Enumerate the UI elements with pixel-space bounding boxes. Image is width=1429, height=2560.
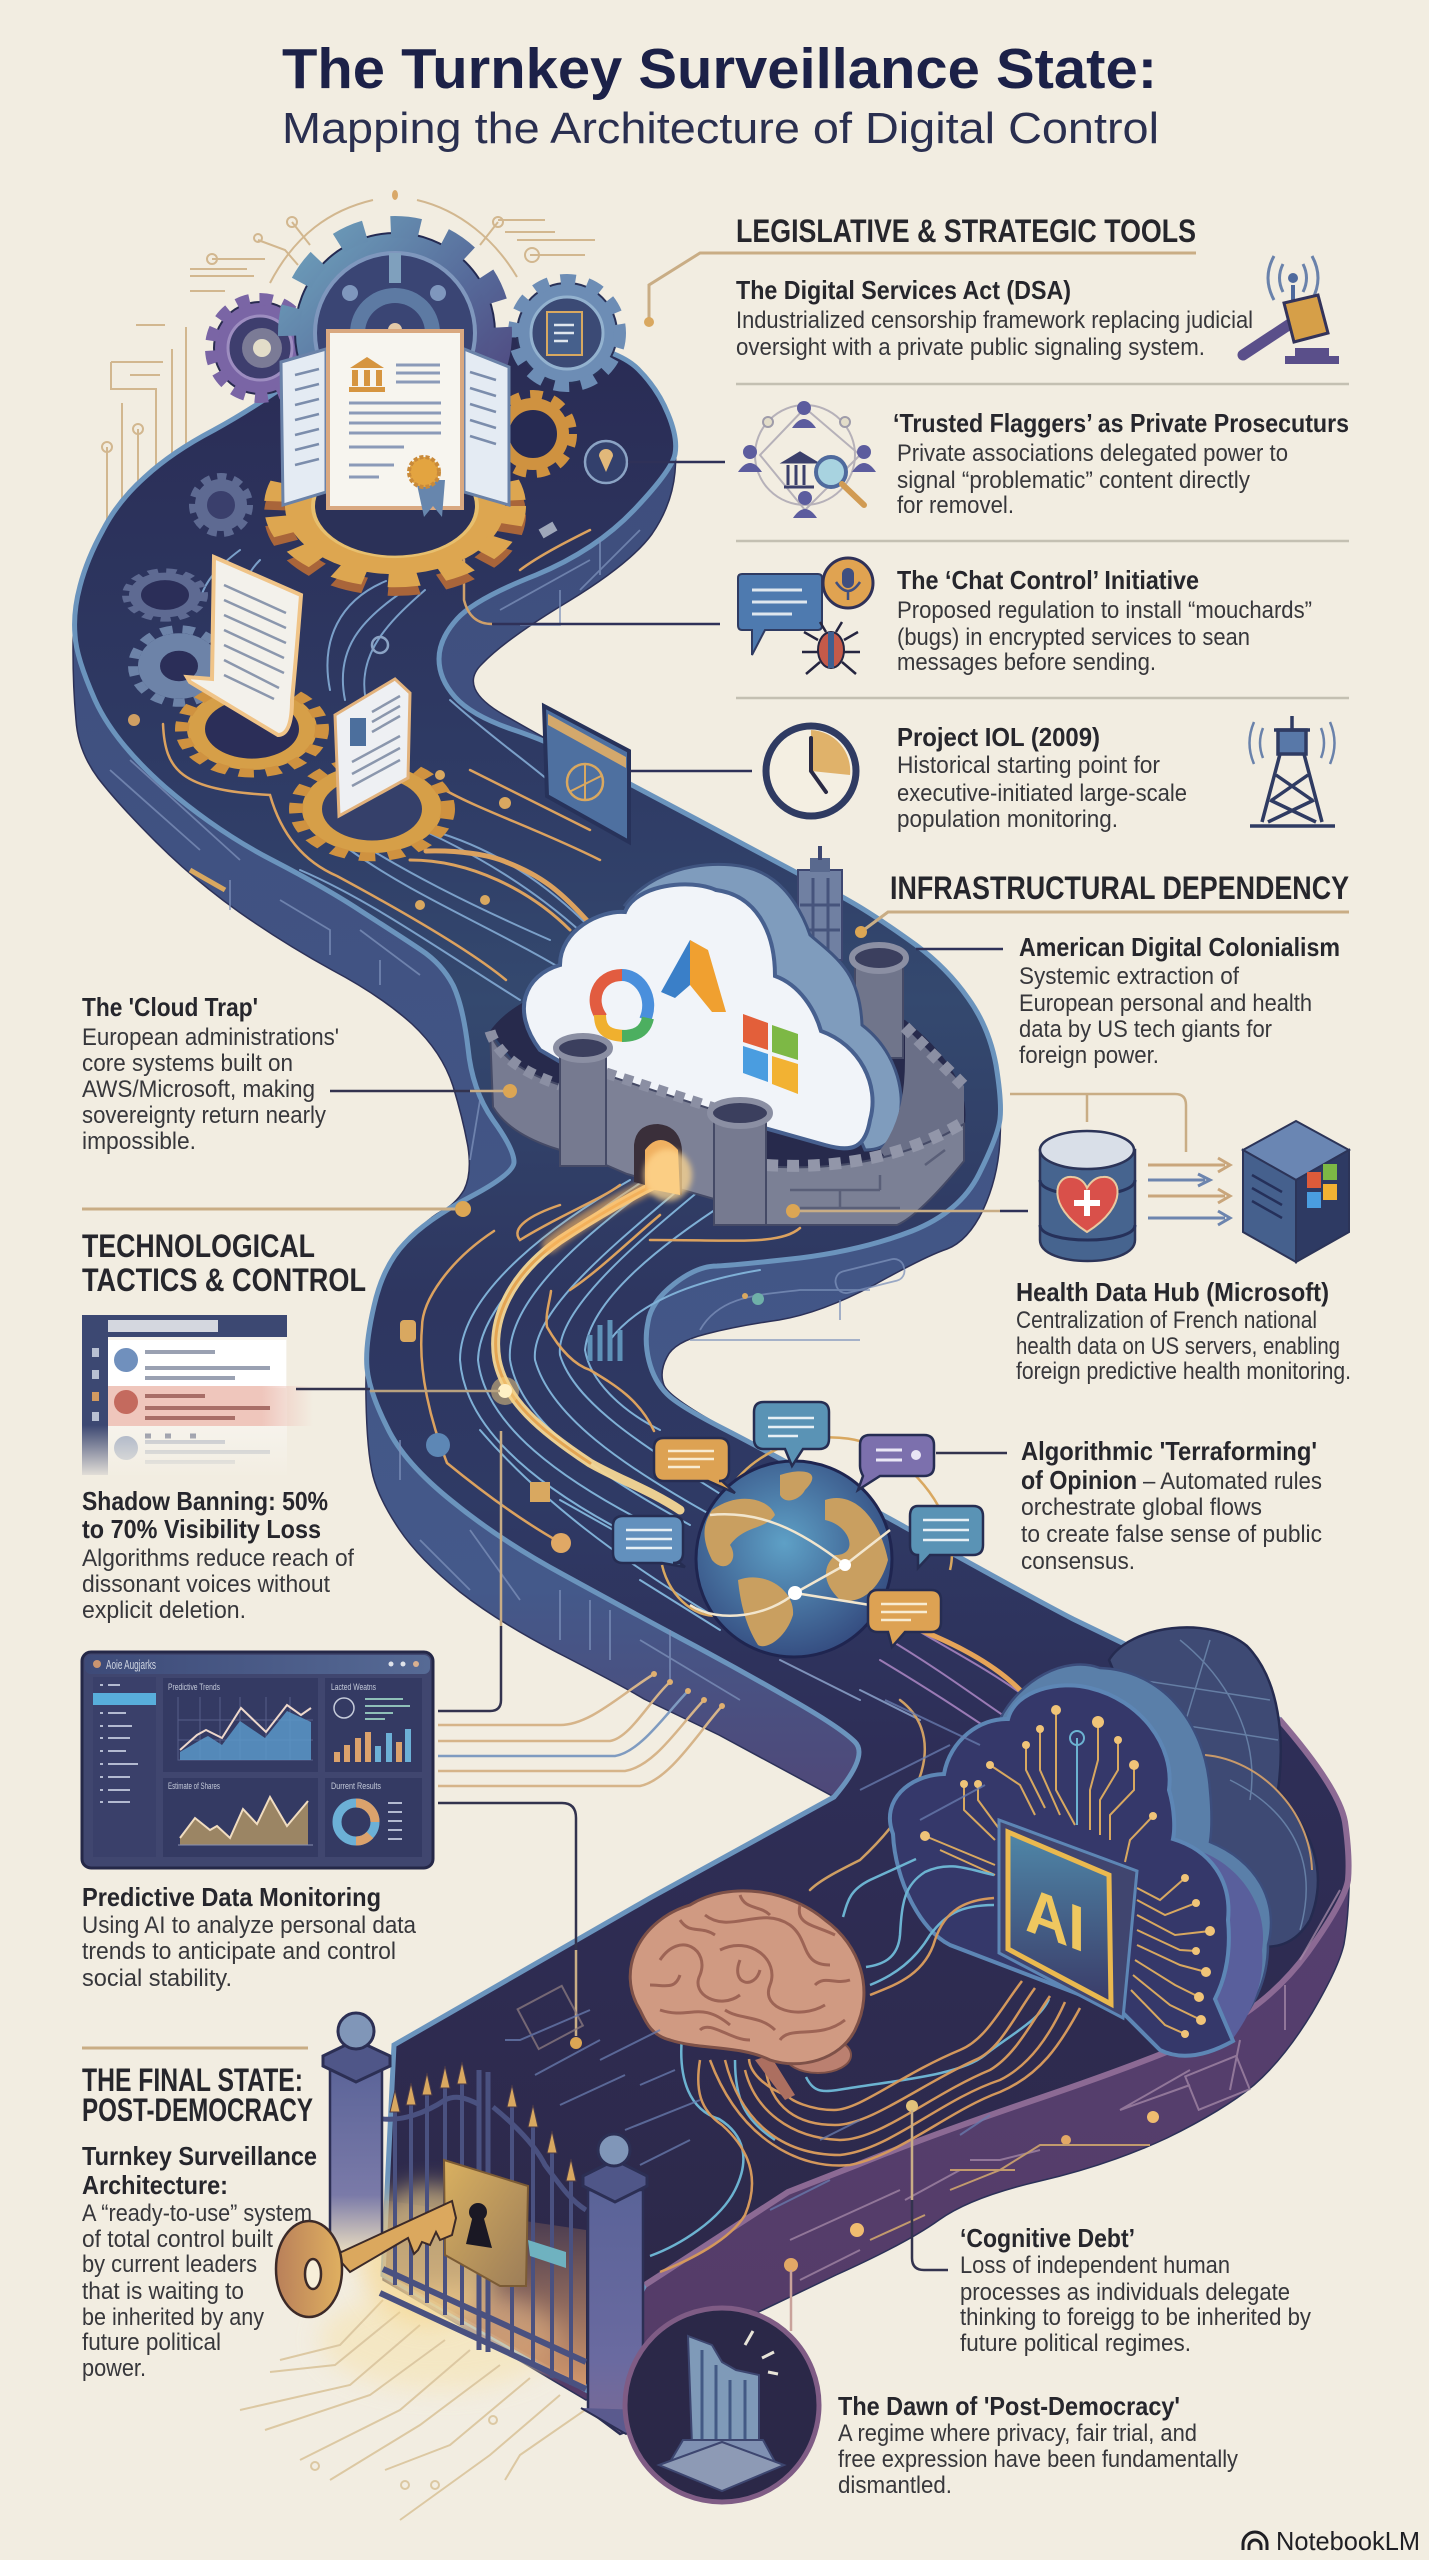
open document pages	[281, 331, 509, 517]
connector wires from dashboard to road	[438, 1671, 725, 1786]
text block: the dawn of post-democracy	[838, 2391, 1238, 2499]
gear cluster and legal document	[211, 227, 627, 588]
area chart panel: Estimate of Shares	[168, 1781, 220, 1791]
connector: predictive monitoring	[438, 1803, 582, 2049]
text block: chat control: (bugs) in encrypted services to sean	[897, 624, 1250, 651]
text block: project IOL: executive-initiated large-scale	[897, 780, 1187, 807]
text block: predictive data monitoring: Using AI to analyze personal data	[82, 1912, 417, 1939]
brain	[630, 1891, 864, 2100]
title block	[282, 37, 1159, 153]
middle road main glowing stream	[496, 1174, 680, 1510]
road node markers	[128, 522, 764, 1553]
arrow tips	[390, 2062, 576, 2181]
microsoft logo	[743, 1014, 798, 1094]
arrows: data flow to server	[1148, 1158, 1230, 1225]
road circuit streams	[163, 530, 1030, 1890]
text block: the dawn of post-democracy: The Dawn of 'Post-Democracy'	[838, 2391, 1180, 2421]
right blue gear with document badge	[514, 280, 620, 386]
right gate post	[581, 2134, 647, 2434]
cloud extrusion	[1000, 1665, 1271, 2030]
text block: turnkey surveillance architecture	[82, 2141, 317, 2382]
text block: predictive data monitoring: Predictive Data Monitoring	[82, 1882, 381, 1912]
text block: Digital Services Act: The Digital Services Act (DSA)	[736, 275, 1071, 305]
upper loop streams	[200, 550, 620, 1000]
divider	[736, 697, 1349, 699]
icon: trusted flaggers network	[738, 401, 876, 518]
text block: algorithmic terraforming	[1021, 1436, 1322, 1575]
connector: shadow banning	[296, 1389, 501, 1711]
icon: microsoft server	[1243, 1121, 1349, 1262]
text block: algorithmic terraforming: – Automated rules	[1143, 1468, 1322, 1495]
divider	[736, 383, 1349, 385]
connector: algorithmic terraforming	[936, 1452, 1007, 1454]
text block: shadow banning: Algorithms reduce reach of	[82, 1545, 354, 1572]
lower-left dark gears	[127, 477, 249, 703]
serpentine road: top surface with rim	[75, 333, 1349, 2390]
section heading: infrastructural dependency	[855, 870, 1349, 938]
far right castle tower	[852, 945, 906, 1058]
connector lines: legislative section	[492, 462, 752, 771]
speech bubbles	[613, 1402, 983, 1647]
large gold gear base	[277, 433, 513, 588]
cloud fortress	[490, 846, 965, 1225]
text block: Digital Services Act: Industrialized censorship framework replacing judicial	[736, 307, 1253, 334]
text block: cognitive debt	[960, 2223, 1311, 2357]
floor circuit lines beneath the gate	[240, 2290, 585, 2520]
text block: cognitive debt: ‘Cognitive Debt’	[960, 2223, 1135, 2253]
text block: cloud trap: The 'Cloud Trap'	[82, 992, 258, 1022]
text block: chat control	[897, 565, 1312, 676]
middle road blue strands	[460, 1180, 760, 1630]
trend panel	[163, 1678, 318, 1772]
section heading: the final state: THE FINAL STATE:	[82, 2062, 303, 2098]
text block: trusted flaggers: Private associations delegated power to	[897, 440, 1288, 467]
section heading: technological tactics and control: TECHNOLOGICAL	[82, 1228, 315, 1264]
icon: chat with microphone and bug	[738, 558, 873, 674]
AI cloud processor	[890, 1627, 1318, 2056]
tall watchtower behind the cloud	[798, 846, 842, 960]
central gate wall	[606, 1075, 714, 1199]
text block: chat control: messages before sending.	[897, 649, 1156, 676]
text block: cloud trap: core systems built on	[82, 1050, 293, 1077]
divider	[736, 540, 1349, 542]
donut panel	[325, 1778, 422, 1857]
text block: turnkey surveillance architecture: by current leaders	[82, 2251, 257, 2278]
wall band circuit details	[110, 530, 907, 1700]
text block: American digital colonialism: Systemic extraction of	[1019, 963, 1239, 990]
text block: turnkey surveillance architecture: Turnkey Surveillance	[82, 2141, 317, 2171]
text block: health data hub: Centralization of French national	[1016, 1307, 1317, 1334]
connector: cognitive debt	[912, 2110, 948, 2270]
stream after globe	[780, 1620, 1030, 1890]
courtyard inside ring wall	[490, 980, 965, 1200]
bar chart panel: Lacted Weatns	[331, 1682, 376, 1692]
text block: cloud trap	[82, 992, 339, 1155]
text block: cognitive debt: future political regimes.	[960, 2330, 1191, 2357]
map pin badge	[585, 441, 627, 483]
section heading: technological tactics and control: TACTICS & CONTROL	[82, 1262, 366, 1298]
text block: algorithmic terraforming: consensus.	[1021, 1548, 1135, 1575]
section heading: legislative and strategic tools: LEGISLATIVE & STRATEGIC TOOLS	[736, 213, 1196, 249]
text block: trusted flaggers	[893, 408, 1349, 519]
text block: algorithmic terraforming: of Opinion	[1021, 1465, 1137, 1495]
text block: cloud trap: sovereignty return nearly	[82, 1102, 326, 1129]
cloud depth	[625, 864, 901, 1150]
connector: broken column	[790, 2270, 792, 2331]
text block: Digital Services Act: oversight with a private public signaling system.	[736, 334, 1205, 361]
circuit cloud	[890, 1685, 1233, 2056]
text block: shadow banning: dissonant voices without	[82, 1571, 330, 1598]
text block: health data hub: foreign predictive health monitoring.	[1016, 1358, 1351, 1385]
text block: cloud trap: European administrations'	[82, 1024, 339, 1051]
title block: Mapping the Architecture of Digital Control	[282, 104, 1159, 153]
small gold gear behind document	[495, 396, 571, 472]
gold gears with scroll and paper	[182, 557, 448, 857]
panel: predictive analytics dashboard	[82, 1652, 433, 1868]
text block: shadow banning: to 70% Visibility Loss	[82, 1514, 321, 1544]
text block: project IOL: Historical starting point for	[897, 752, 1160, 779]
front tower	[710, 1100, 770, 1225]
purple rim of final road section	[645, 1719, 1349, 2285]
padlock plate	[444, 2160, 528, 2286]
text block: trusted flaggers: ‘Trusted Flaggers’ as Private Prosecuturs	[893, 408, 1349, 438]
section heading: the final state	[82, 2048, 313, 2128]
text block: the dawn of post-democracy: A regime where privacy, fair trial, and	[838, 2420, 1197, 2447]
panel: shadow banning feed mockup	[82, 1315, 322, 1480]
text block: algorithmic terraforming: orchestrate global flows	[1021, 1494, 1262, 1521]
section heading: the final state: POST-DEMOCRACY	[82, 2092, 313, 2128]
text block: algorithmic terraforming: Algorithmic 'Terraforming'	[1021, 1436, 1317, 1466]
icon: health database	[1040, 1131, 1135, 1261]
text block: turnkey surveillance architecture: that is waiting to	[82, 2278, 244, 2305]
left purple gear	[211, 299, 309, 397]
mesh drum behind the cloud	[1109, 1627, 1318, 1947]
icon: broken column medallion	[625, 2308, 819, 2502]
NotebookLM logo and wordmark: NotebookLM	[1276, 2526, 1420, 2556]
text block: predictive data monitoring	[82, 1882, 417, 1992]
lower lobe extrusion	[1173, 1845, 1263, 2040]
text block: American digital colonialism: foreign power.	[1019, 1042, 1159, 1069]
white cloud	[524, 884, 873, 1148]
text block: health data hub: health data on US servers, enabling	[1016, 1333, 1340, 1360]
amazon style A logo	[661, 940, 726, 1012]
text block: shadow banning: explicit deletion.	[82, 1597, 246, 1624]
lower right castle wall	[762, 1124, 964, 1225]
connectors: infrastructure	[786, 949, 1186, 1218]
serpentine road: outer wall band	[73, 333, 1349, 2400]
left castle wall	[490, 1031, 560, 1150]
small paper	[335, 679, 410, 816]
panel: predictive analytics dashboard: Aoie Augjarks	[106, 1657, 156, 1672]
text block: algorithmic terraforming: to create false sense of public	[1021, 1521, 1322, 1548]
text block: predictive data monitoring: trends to anticipate and control	[82, 1938, 396, 1965]
text block: cloud trap: AWS/Microsoft, making	[82, 1076, 315, 1103]
bar chart panel	[325, 1678, 422, 1772]
section heading: technological tactics and control	[82, 1201, 471, 1298]
text block: turnkey surveillance architecture: be inherited by any	[82, 2304, 264, 2331]
sidebar	[93, 1677, 156, 1857]
text block: chat control: Proposed regulation to install “mouchards”	[897, 597, 1312, 624]
text block: turnkey surveillance architecture: future political	[82, 2329, 221, 2356]
decorative circuit lines around the gears	[102, 190, 595, 652]
text block: shadow banning	[82, 1486, 354, 1624]
icon: gavel with signal	[1243, 256, 1339, 364]
text block: shadow banning: Shadow Banning: 50%	[82, 1486, 328, 1516]
glowing dots on purple wall	[784, 2111, 1159, 2272]
area chart panel	[163, 1778, 318, 1857]
google cloud logo	[596, 975, 648, 1036]
text block: chat control: The ‘Chat Control’ Initiative	[897, 565, 1199, 595]
middle road gold wires	[421, 1185, 800, 1543]
text block: predictive data monitoring: social stability.	[82, 1965, 232, 1992]
text block: cognitive debt: thinking to foreigg to be inherited by	[960, 2304, 1311, 2331]
donut panel: Durrent Results	[331, 1781, 381, 1791]
main blue gear	[289, 227, 501, 439]
text block: cognitive debt: processes as individuals delegate	[960, 2279, 1290, 2306]
text block: cognitive debt: Loss of independent human	[960, 2252, 1230, 2279]
AI chip	[999, 1820, 1137, 2018]
trend panel: Predictive Trends	[168, 1682, 220, 1692]
section heading: legislative and strategic tools	[644, 213, 1196, 327]
text block: American digital colonialism: European personal and health	[1019, 990, 1312, 1017]
tablet on the road	[544, 706, 629, 842]
icon: clock	[766, 726, 856, 816]
cloud circuit traces	[925, 1710, 1210, 2034]
continents	[704, 1471, 888, 1646]
road circuit details in final section	[505, 1700, 990, 2210]
left tower	[556, 1036, 610, 1166]
title block: The Turnkey Surveillance State:	[282, 37, 1157, 101]
left gate post	[323, 2013, 390, 2252]
back right castle wall	[880, 1027, 964, 1180]
text block: turnkey surveillance architecture: Architecture:	[82, 2170, 228, 2200]
text block: the dawn of post-democracy: dismantled.	[838, 2472, 952, 2499]
warm underglow behind bars	[383, 2200, 586, 2390]
text block: turnkey surveillance architecture: of total control built	[82, 2226, 273, 2253]
text block: American digital colonialism: data by US tech giants for	[1019, 1016, 1272, 1043]
section heading: infrastructural dependency: INFRASTRUCTURAL DEPENDENCY	[890, 870, 1349, 906]
text block: health data hub: Health Data Hub (Microsoft)	[1016, 1277, 1329, 1307]
connector: cloud trap	[330, 1084, 517, 1098]
glowing scroll	[187, 557, 301, 735]
text block: trusted flaggers: signal “problematic” content directly	[897, 467, 1250, 494]
wires linking brain and chip	[650, 1859, 1080, 2272]
surveillance gate	[276, 2013, 647, 2434]
gate arch with glow	[634, 1124, 692, 1201]
icon: radio watch tower	[1250, 716, 1335, 826]
text block: project IOL: Project IOL (2009)	[897, 722, 1100, 752]
AI chip: AI	[1025, 1873, 1085, 1967]
text block: turnkey surveillance architecture: A “ready-to-use” system	[82, 2200, 312, 2227]
text block: trusted flaggers: for removel.	[897, 492, 1014, 519]
globe with speech bubbles	[613, 1402, 983, 1657]
text block: project IOL	[897, 722, 1187, 833]
text block: turnkey surveillance architecture: power.	[82, 2355, 146, 2382]
text block: health data hub	[1016, 1277, 1351, 1385]
key	[276, 2201, 456, 2317]
gate bars	[373, 2070, 586, 2389]
text block: cloud trap: impossible.	[82, 1128, 196, 1155]
text block: American digital colonialism: American Digital Colonialism	[1019, 932, 1340, 962]
text block: Digital Services Act	[736, 275, 1253, 361]
text block: American digital colonialism	[1019, 932, 1340, 1069]
text block: the dawn of post-democracy: free expression have been fundamentally	[838, 2446, 1238, 2473]
text block: project IOL: population monitoring.	[897, 806, 1118, 833]
